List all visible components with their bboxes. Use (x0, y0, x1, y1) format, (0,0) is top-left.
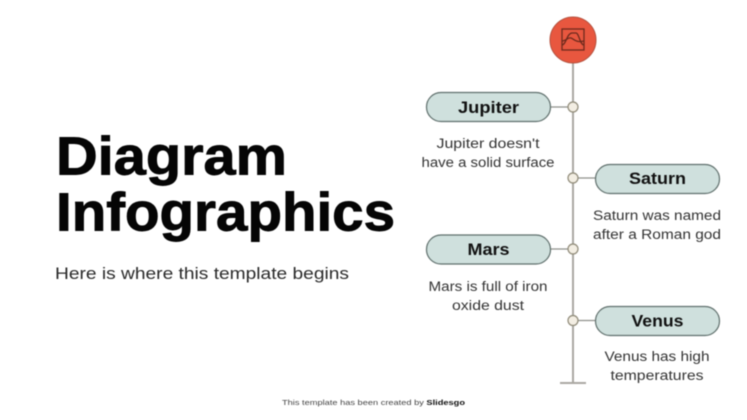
description: Saturn: after a Roman god (593, 227, 721, 242)
item: Venus (568, 306, 720, 383)
icon: chart badge (550, 17, 596, 63)
description: Venus (604, 349, 710, 383)
description: Venus: Venus has high (604, 349, 710, 364)
description: Venus: temperatures (610, 368, 704, 383)
title: Diagram (56, 126, 287, 186)
pill: Jupiter (426, 92, 550, 122)
connector: Jupiter (550, 106, 573, 108)
connector: Venus (573, 320, 596, 322)
description: Mars: Mars is full of iron (428, 279, 548, 294)
timeline axis (560, 60, 586, 383)
description: Jupiter: Jupiter doesn't (436, 136, 540, 151)
description: Saturn (593, 208, 721, 242)
label: Mars: Mars (468, 240, 510, 259)
label: Saturn: Saturn (629, 169, 686, 188)
pill: Saturn (596, 164, 720, 194)
pill: Venus (596, 306, 720, 336)
title (56, 126, 395, 242)
footer credit: This template has been created by Slidesgo (282, 398, 466, 407)
pill: Mars (426, 235, 550, 264)
description: Saturn: Saturn was named (593, 208, 721, 223)
description: Mars: oxide dust (452, 298, 524, 313)
node: Jupiter (568, 102, 578, 112)
subtitle: Here is where this template begins (55, 265, 349, 283)
item: Jupiter (422, 92, 578, 170)
description: Mars (428, 279, 548, 313)
description: Jupiter: have a solid surface (422, 155, 554, 170)
item: Mars (426, 235, 578, 313)
item: Saturn (568, 164, 721, 242)
label: Jupiter: Jupiter (458, 98, 519, 117)
label: Venus: Venus (632, 312, 684, 330)
description: Jupiter (422, 136, 554, 170)
node: Venus (568, 316, 578, 326)
node: Saturn (568, 173, 578, 183)
connector: Mars (550, 248, 573, 250)
connector: Saturn (573, 177, 596, 179)
node: Mars (568, 244, 578, 254)
title: Infographics (56, 182, 395, 242)
